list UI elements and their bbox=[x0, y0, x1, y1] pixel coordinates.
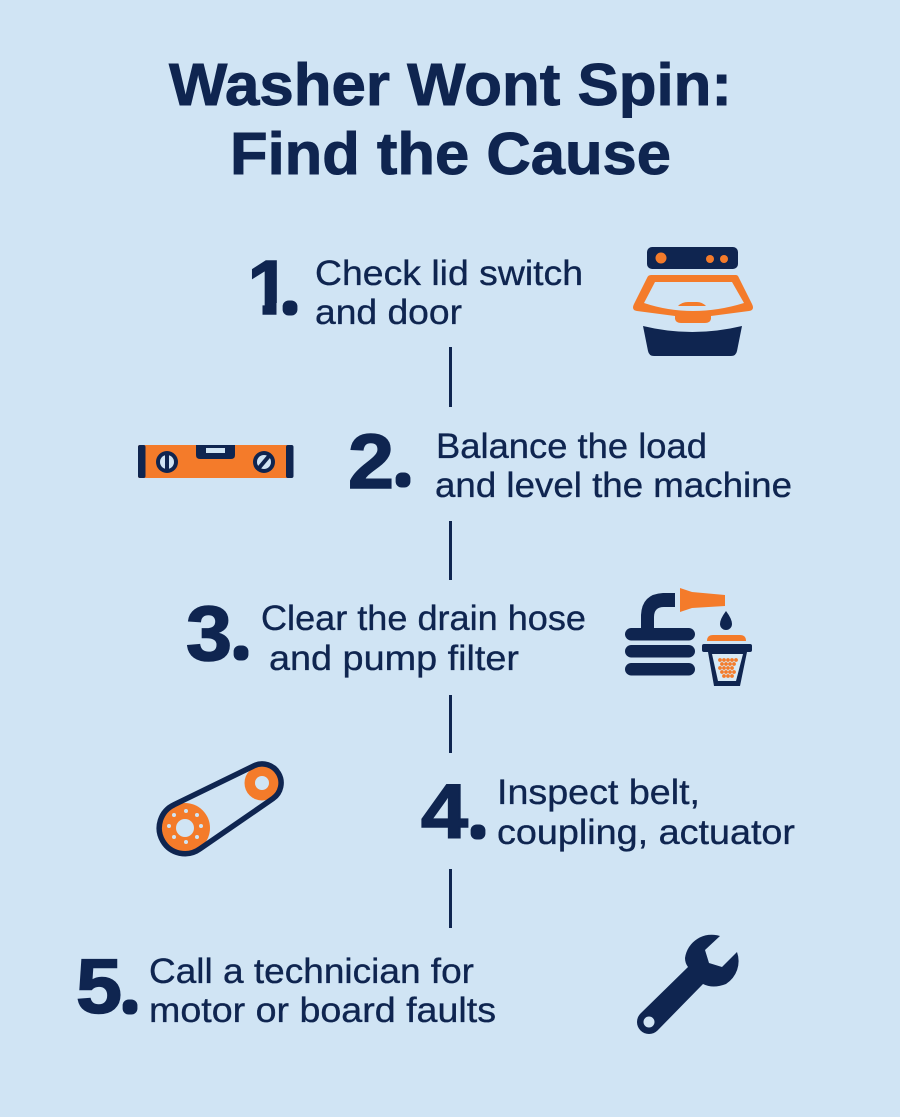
step 5 text: motor or board faults bbox=[149, 991, 496, 1030]
step 2 number: . bbox=[400, 464, 406, 486]
step 3 text: Clear the drain hose bbox=[261, 599, 586, 638]
step 4 number: 4 bbox=[421, 769, 468, 855]
step 5 number: 5 bbox=[76, 944, 122, 1030]
connector line 2 bbox=[449, 521, 452, 580]
step 3 text bbox=[261, 599, 586, 678]
step 2 text bbox=[435, 427, 792, 505]
connector line 3 bbox=[449, 695, 452, 753]
icon: washing machine bbox=[633, 247, 753, 356]
title: Find the Cause bbox=[230, 121, 671, 187]
step 3: clear the drain hose bbox=[186, 588, 752, 686]
step 1 text bbox=[315, 254, 583, 332]
step 2 text: Balance the load bbox=[436, 427, 707, 466]
step 4 text: Inspect belt, bbox=[497, 773, 700, 812]
step 2 number: 2 bbox=[348, 419, 394, 505]
step 4 text: coupling, actuator bbox=[497, 813, 795, 852]
step 1 text: Check lid switch bbox=[315, 254, 583, 293]
step 5 text: Call a technician for bbox=[149, 952, 474, 991]
step 5: call a technician bbox=[76, 935, 739, 1034]
title bbox=[169, 52, 732, 187]
step 5 number: . bbox=[127, 991, 133, 1013]
step 1 number: 1 bbox=[248, 245, 290, 331]
step 3 number: 3 bbox=[186, 591, 232, 677]
step 1: check lid switch bbox=[240, 245, 753, 356]
step 4 number: . bbox=[475, 816, 481, 838]
step 2 text: and level the machine bbox=[435, 466, 792, 505]
connector line 1 bbox=[449, 347, 452, 407]
step 3 text: and pump filter bbox=[269, 639, 519, 678]
icon: spirit level bbox=[138, 445, 294, 478]
title: Washer Wont Spin: bbox=[169, 52, 732, 118]
step 4 text bbox=[497, 773, 795, 852]
step 2: balance the load bbox=[138, 419, 792, 505]
step 5 text bbox=[149, 952, 496, 1030]
icon: drain hose and filter bbox=[625, 588, 752, 686]
step 1 text: and door bbox=[315, 293, 462, 332]
filter debris dots bbox=[718, 658, 738, 678]
step 3 number: . bbox=[238, 637, 244, 659]
icon: belt and pulleys bbox=[159, 764, 281, 854]
icon: wrench bbox=[637, 935, 739, 1034]
step 1 number: . bbox=[287, 292, 293, 314]
step 4: inspect belt bbox=[159, 764, 795, 855]
connector line 4 bbox=[449, 869, 452, 928]
